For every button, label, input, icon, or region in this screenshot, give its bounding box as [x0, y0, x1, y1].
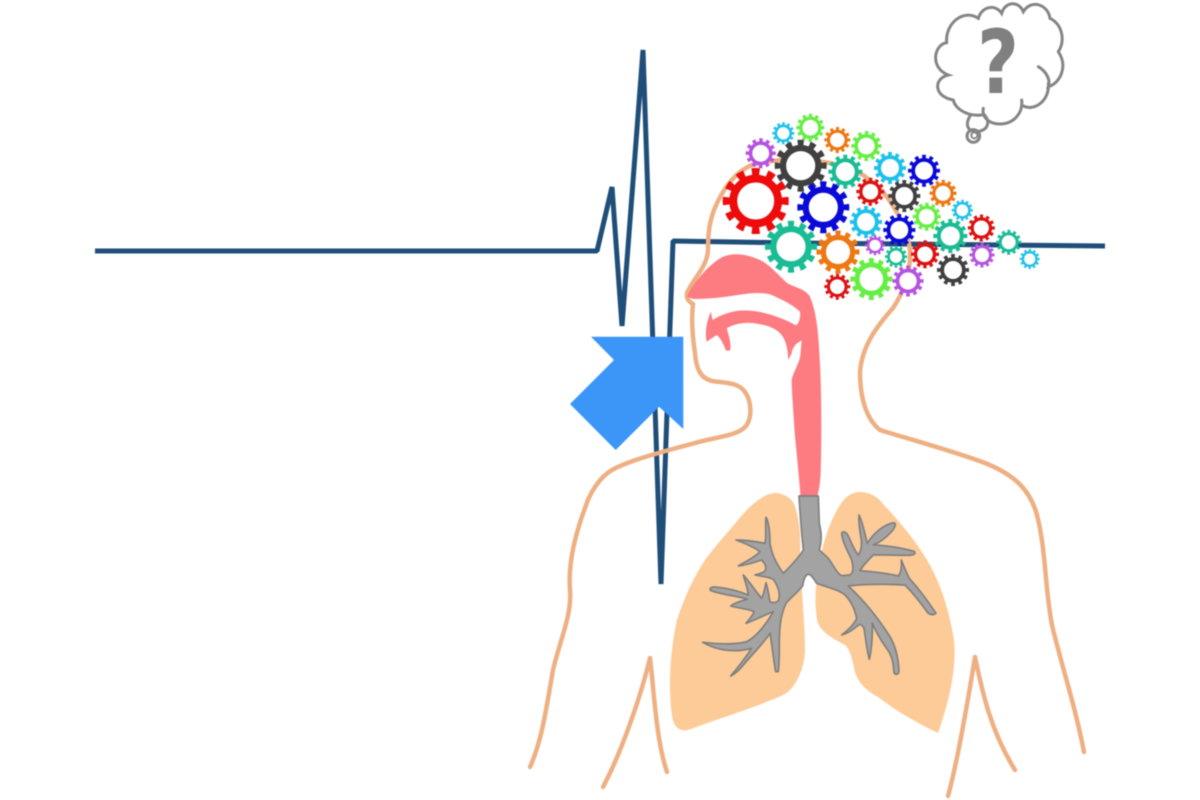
arrow: blue inhale arrow pointing at mouth — [570, 337, 683, 450]
body outline — [530, 159, 1084, 796]
lungs — [670, 492, 955, 733]
icon: gears in the brain — [723, 114, 1040, 300]
chart line: ECG trace — [95, 50, 1105, 584]
bronchial tree — [703, 496, 936, 676]
question mark: ? — [977, 11, 1019, 114]
icon: thought bubble with question mark — [936, 4, 1063, 142]
airway: nasal cavity, mouth and pharynx — [687, 254, 821, 498]
